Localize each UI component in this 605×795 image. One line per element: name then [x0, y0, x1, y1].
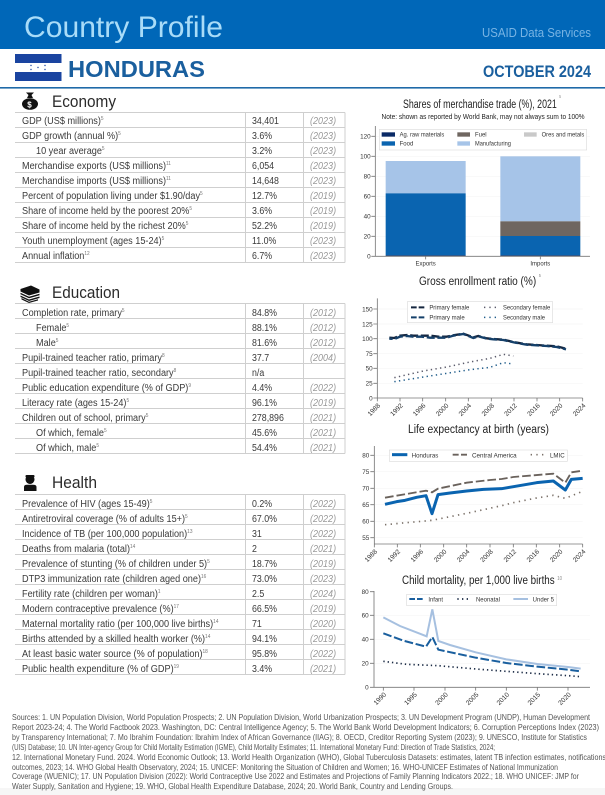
icon: money bag — [22, 92, 38, 110]
row: contraceptive — [22, 603, 336, 615]
chart title: Shares of merchandise trade (%), 2021 — [403, 99, 604, 111]
heading: Economy: Economy — [52, 93, 117, 111]
x axis labels: 2016 — [526, 548, 541, 564]
row: of which female — [36, 427, 336, 439]
y axis labels: 20 — [362, 661, 369, 668]
row: poverty — [22, 190, 336, 202]
y axis labels: 75 — [362, 469, 370, 476]
row: GDP — [22, 115, 336, 127]
line: secondary male — [394, 363, 513, 382]
row: completion rate: (2012) — [310, 307, 336, 319]
row: HIV: Prevalence of HIV (ages 15-49) — [22, 498, 150, 510]
row: maternal mortality: (2020) — [310, 618, 336, 630]
x axis labels: 2008 — [481, 402, 496, 418]
x axis labels: 2005 — [465, 691, 481, 707]
x axis labels: 1996 — [410, 548, 425, 564]
chart: child mortality — [362, 575, 590, 707]
row: children out of school: 5 — [146, 413, 149, 419]
chart: life expectancy at birth — [362, 424, 588, 564]
row: merchandise exports: 11 — [166, 161, 171, 167]
row: fertility — [22, 588, 336, 600]
row: skilled birth: 94.1% — [252, 633, 277, 645]
y axis labels: 60 — [362, 613, 369, 620]
row: merchandise exports: (2023) — [310, 160, 336, 172]
row: teacher ratio primary: (2004) — [310, 352, 336, 364]
row: income poorest: 5 — [189, 206, 192, 212]
row: children out of school: (2021) — [310, 412, 336, 424]
row: merchandise exports — [22, 160, 336, 172]
x axis labels: 2015 — [527, 691, 542, 707]
row: poverty: 5 — [200, 191, 203, 197]
legend: Neonatal — [476, 597, 500, 603]
row: poverty: (2019) — [310, 190, 336, 202]
x axis labels: 2004 — [456, 548, 472, 564]
row: maternal mortality: 14 — [213, 619, 219, 625]
row: GDP growth: GDP growth (annual %) — [22, 130, 118, 142]
row: of which female: Of which, female — [36, 427, 104, 439]
row: 10 year average: 5 — [102, 146, 105, 152]
y axis labels: 60 — [364, 194, 371, 201]
row: stunting — [22, 558, 336, 570]
row: 10 year average: (2023) — [310, 145, 336, 157]
row: literacy: (2019) — [310, 397, 336, 409]
country heading band — [0, 54, 605, 89]
row: income poorest — [22, 205, 336, 217]
row: male completion: Male — [36, 337, 56, 349]
icon: money bag: $ — [27, 100, 32, 110]
row: income richest — [22, 220, 336, 232]
row: children out of school: 278,896 — [252, 412, 284, 424]
heading: Education: Education — [52, 284, 120, 302]
row: education expenditure: 9 — [188, 383, 191, 389]
x axis labels: 2020 — [549, 402, 565, 418]
row: youth unemployment: 11.0% — [252, 235, 277, 247]
row: GDP: 34,401 — [252, 115, 279, 127]
row: GDP growth: 3.6% — [252, 130, 272, 142]
row: of which male: Of which, male — [36, 442, 96, 454]
row: HIV: 5 — [150, 499, 153, 505]
row: merchandise imports: (2023) — [310, 175, 336, 187]
row: of which male — [36, 442, 336, 454]
row: contraceptive: (2019) — [310, 603, 336, 615]
row: teacher ratio secondary: Pupil-trained teacher ratio, secondary — [22, 367, 174, 379]
x axis labels: 2024 — [572, 548, 588, 564]
row: children out of school: Children out of school, primary — [22, 412, 146, 424]
y axis labels: 0 — [369, 395, 373, 402]
chart title: Gross enrollment ratio (%) — [419, 276, 553, 288]
row: TB: 31 — [252, 528, 262, 540]
row: of which male: 54.4% — [252, 442, 277, 454]
sources footnote — [12, 712, 605, 791]
row: maternal mortality: Maternal mortality ratio (per 100,000 live births) — [22, 618, 213, 630]
legend: Manufacturing — [475, 142, 511, 148]
row: teacher ratio primary: 37.7 — [252, 352, 269, 364]
row: skilled birth: 14 — [205, 634, 210, 640]
row: skilled birth — [22, 633, 336, 645]
y axis labels — [362, 453, 370, 542]
legend — [407, 594, 557, 606]
row: female completion: Female — [36, 322, 66, 334]
row: 10 year average: 3.2% — [252, 145, 272, 157]
y axis labels: 55 — [362, 535, 370, 542]
row: children out of school — [22, 412, 336, 424]
legend: Under 5 — [533, 597, 555, 603]
x axis labels: 2000 — [433, 548, 449, 564]
row: DTP3: 16 — [201, 574, 206, 580]
bar: imports — [500, 156, 580, 256]
x axis labels: 2010 — [496, 691, 511, 707]
row: inflation: 6.7% — [252, 250, 272, 262]
legend: LMIC — [550, 453, 565, 459]
row: DTP3: 73.0% — [252, 573, 277, 585]
legend — [407, 302, 553, 323]
row: contraceptive: 66.5% — [252, 603, 277, 615]
row: water: 18 — [203, 649, 208, 655]
x axis labels: 2020 — [557, 691, 573, 707]
chart title: 5 — [559, 94, 561, 99]
y axis labels — [360, 134, 371, 261]
row: youth unemployment: 5 — [162, 236, 164, 242]
x axis labels — [364, 548, 588, 564]
row: 10 year average — [36, 145, 336, 157]
x axis labels: 1988 — [364, 548, 379, 564]
chart title: Life expectancy at birth (years) — [408, 424, 549, 436]
row: health expenditure: 3.4% — [252, 663, 272, 675]
row: merchandise imports: 11 — [166, 176, 171, 182]
y axis labels: 75 — [366, 351, 373, 358]
row: literacy: 5 — [126, 398, 129, 404]
x axis labels: 2000 — [435, 402, 451, 418]
row: merchandise exports: Merchandise exports (US$ millions) — [22, 160, 166, 172]
row: income poorest: Share of income held by the poorest 20% — [22, 205, 189, 217]
legend: Secondary female — [503, 306, 551, 312]
row: poverty: 12.7% — [252, 190, 277, 202]
x axis labels: 1992 — [387, 548, 402, 564]
y axis labels: 125 — [362, 321, 373, 328]
y axis labels — [362, 306, 373, 402]
x axis labels: 2004 — [458, 402, 473, 418]
row: male completion: 5 — [56, 338, 59, 344]
row: stunting: (2019) — [310, 558, 336, 570]
y axis labels: 120 — [360, 134, 371, 141]
row: teacher ratio primary: 8 — [162, 353, 165, 359]
row: youth unemployment: (2023) — [310, 235, 336, 247]
icon: flag of Honduras — [15, 54, 62, 81]
legend — [379, 129, 587, 150]
row: malaria: Deaths from malaria (total) — [22, 543, 130, 555]
table: economy indicators — [15, 112, 345, 262]
row: fertility: 2.5 — [252, 588, 264, 600]
legend: Secondary male — [503, 316, 546, 322]
legend: Infant — [428, 597, 443, 603]
x axis labels: Exports — [416, 262, 436, 268]
row: TB — [22, 528, 336, 540]
row: inflation — [22, 250, 336, 262]
y axis labels: 40 — [364, 214, 371, 221]
chart title: 10 — [557, 576, 562, 582]
chart: gross enrollment ratio — [362, 273, 588, 418]
row: merchandise exports: 6,054 — [252, 160, 275, 172]
panel: education — [15, 284, 345, 454]
row: DTP3: DTP3 immunization rate (children aged one) — [22, 573, 201, 585]
row: health expenditure: 19 — [174, 664, 179, 670]
table: education indicators — [15, 304, 345, 454]
y axis labels — [362, 589, 369, 692]
line: Honduras — [385, 478, 583, 514]
line: primary male — [389, 334, 566, 349]
row: female completion: 88.1% — [252, 322, 277, 334]
row: fertility: (2024) — [310, 588, 336, 600]
row: youth unemployment: Youth unemployment (ages 15-24) — [22, 235, 162, 247]
x axis labels: 2024 — [572, 402, 588, 418]
row: skilled birth: (2019) — [310, 633, 336, 645]
row: male completion — [36, 337, 336, 349]
legend — [389, 450, 567, 461]
row: inflation: (2023) — [310, 250, 336, 262]
y axis labels: 80 — [364, 174, 371, 181]
row: GDP: (2023) — [310, 115, 336, 127]
row: maternal mortality — [22, 618, 336, 630]
row: contraceptive: Modern contraceptive prevalence (%) — [22, 603, 174, 615]
header banner — [0, 0, 605, 49]
row: stunting: 5 — [207, 559, 210, 565]
row: antiretroviral: (2022) — [310, 513, 336, 525]
sources footnote: Water Supply, Sanitation and Hygiene; 19. WHO, Global Health Expenditure Database, 2024; 20. World Bank, Country and Lending Groups. — [12, 781, 453, 791]
row: GDP growth — [22, 130, 336, 142]
row: fertility: Fertility rate (children per woman) — [22, 588, 158, 600]
row: of which female: 5 — [104, 428, 107, 434]
x axis labels: 2012 — [503, 402, 519, 418]
legend: Primary female — [429, 306, 470, 312]
row: fertility: 1 — [158, 589, 161, 595]
line: under 5 — [383, 609, 581, 669]
row: teacher ratio secondary: n/a — [252, 367, 265, 379]
y axis labels: 20 — [364, 234, 371, 241]
row: merchandise imports — [22, 175, 336, 187]
row: of which male: (2021) — [310, 442, 336, 454]
x axis labels: 2008 — [479, 548, 495, 564]
x axis labels: 1996 — [412, 402, 428, 418]
x axis labels: 1988 — [367, 402, 382, 418]
row: 10 year average: 10 year average — [36, 145, 102, 157]
row: education expenditure: Public education expenditure (% of GDP) — [22, 382, 188, 394]
row: GDP growth: (2023) — [310, 130, 336, 142]
publisher: USAID Data Services: USAID Data Services — [482, 26, 591, 40]
y axis labels: 50 — [366, 366, 373, 373]
row: completion rate — [22, 307, 336, 319]
icon: health worker — [24, 475, 36, 491]
row: of which female: (2021) — [310, 427, 336, 439]
x axis labels — [367, 402, 588, 418]
x axis labels: 1995 — [403, 691, 419, 707]
x axis labels: 1990 — [373, 691, 388, 707]
legend: Ag. raw materials — [400, 133, 444, 139]
row: income richest: 52.2% — [252, 220, 277, 232]
legend: Fuel — [475, 133, 487, 139]
row: malaria: 14 — [130, 544, 135, 550]
row: literacy — [22, 397, 336, 409]
table: health indicators — [15, 494, 345, 675]
row: of which female: 45.6% — [252, 427, 277, 439]
chart title: Child mortality, per 1,000 live births — [402, 575, 581, 587]
y axis labels: 80 — [362, 589, 369, 596]
row: malaria: 2 — [252, 543, 257, 555]
row: income poorest: (2019) — [310, 205, 336, 217]
row: maternal mortality: 71 — [252, 618, 262, 630]
row: completion rate: Completion rate, primary — [22, 307, 122, 319]
row: contraceptive: 17 — [174, 604, 179, 610]
x axis labels — [373, 691, 573, 707]
row: male completion: (2012) — [310, 337, 336, 349]
icon: stack of books — [20, 286, 40, 303]
y axis labels: 0 — [367, 254, 371, 261]
row: education expenditure: 4.4% — [252, 382, 272, 394]
legend: Primary male — [429, 316, 465, 322]
row: poverty: Percent of population living under $1.90/day — [22, 190, 200, 202]
line: secondary female — [394, 354, 513, 378]
row: HIV — [22, 498, 336, 510]
y axis labels: 25 — [366, 381, 373, 388]
bar: exports — [386, 161, 466, 256]
row: HIV: 0.2% — [252, 498, 272, 510]
row: literacy: Literacy rate (ages 15-24) — [22, 397, 126, 409]
x axis labels — [416, 262, 550, 268]
row: inflation: 12 — [84, 251, 90, 257]
row: antiretroviral: Antiretroviral coverage (% of adults 15+) — [22, 513, 185, 525]
y axis labels: 100 — [360, 154, 371, 161]
line: LMIC — [385, 491, 583, 525]
row: stunting: 18.7% — [252, 558, 277, 570]
y axis labels: 60 — [362, 519, 370, 526]
row: teacher ratio primary — [22, 352, 336, 364]
row: malaria: (2021) — [310, 543, 336, 555]
row: GDP: 5 — [101, 116, 104, 122]
legend: Central America — [472, 453, 517, 459]
row: teacher ratio secondary: 8 — [174, 368, 176, 374]
panel: economy — [15, 92, 345, 262]
row: teacher ratio primary: Pupil-trained teacher ratio, primary — [22, 352, 162, 364]
x axis labels: 2016 — [526, 402, 542, 418]
y axis labels: 100 — [362, 336, 373, 343]
row: female completion: (2012) — [310, 322, 336, 334]
row: DTP3: (2023) — [310, 573, 336, 585]
legend: Ores and metals — [542, 133, 584, 139]
panel: health — [15, 474, 345, 675]
row: skilled birth: Births attended by a skilled health worker (%) — [22, 633, 205, 645]
chart: shares of merchandise trade — [360, 94, 590, 268]
row: health expenditure — [22, 663, 336, 675]
row: health expenditure: (2021) — [310, 663, 336, 675]
heading: Health: Health — [52, 474, 97, 492]
y axis labels: 0 — [365, 685, 369, 692]
row: income poorest: 3.6% — [252, 205, 272, 217]
legend: Honduras — [412, 453, 438, 459]
line: primary female — [389, 334, 566, 349]
row: TB: (2022) — [310, 528, 336, 540]
row: female completion: 5 — [66, 323, 69, 329]
row: income richest: 5 — [186, 221, 189, 227]
row: youth unemployment — [22, 235, 336, 247]
row: health expenditure: Public health expenditure (% of GDP) — [22, 663, 174, 675]
line: Central America — [385, 471, 583, 498]
row: GDP growth: 5 — [118, 131, 121, 137]
row: inflation: Annual inflation — [22, 250, 84, 262]
row: education expenditure: (2022) — [310, 382, 336, 394]
row: GDP: GDP (US$ millions) — [22, 115, 101, 127]
title: Country Profile: Country Profile — [24, 11, 223, 44]
row: TB: Incidence of TB (per 100,000 population) — [22, 528, 187, 540]
x axis labels: 2020 — [549, 548, 565, 564]
row: completion rate: 84.8% — [252, 307, 277, 319]
row: malaria — [22, 543, 336, 555]
row: education expenditure — [22, 382, 336, 394]
row: male completion: 81.6% — [252, 337, 277, 349]
row: antiretroviral: 5 — [185, 514, 188, 520]
row: antiretroviral: 67.0% — [252, 513, 277, 525]
y axis labels: 150 — [362, 306, 373, 313]
y axis labels: 65 — [362, 502, 370, 509]
row: water: 95.8% — [252, 648, 277, 660]
row: literacy: 96.1% — [252, 397, 277, 409]
row: water: (2022) — [310, 648, 336, 660]
row: DTP3 — [22, 573, 336, 585]
row: of which male: 5 — [96, 443, 99, 449]
row: merchandise imports: 14,648 — [252, 175, 279, 187]
y axis labels: 80 — [362, 453, 370, 460]
country name: HONDURAS — [68, 56, 205, 82]
legend: Food — [400, 142, 413, 148]
row: teacher ratio secondary — [22, 367, 265, 379]
y axis labels: 40 — [362, 637, 369, 644]
x axis labels: 2000 — [434, 691, 450, 707]
x axis labels: 1992 — [389, 402, 405, 418]
row: water: At least basic water source (% of population) — [22, 648, 203, 660]
row: merchandise imports: Merchandise imports (US$ millions) — [22, 175, 166, 187]
row: income richest: (2019) — [310, 220, 336, 232]
x axis labels: 2012 — [503, 548, 518, 564]
row: income richest: Share of income held by the richest 20% — [22, 220, 186, 232]
x axis labels: Imports — [530, 262, 550, 268]
y axis labels: 70 — [362, 486, 370, 493]
line: neonatal — [383, 661, 581, 677]
line: infant — [383, 633, 581, 671]
row: HIV: (2022) — [310, 498, 336, 510]
row: water — [22, 648, 336, 660]
row: female completion — [36, 322, 336, 334]
chart title: 5 — [539, 273, 541, 278]
row: antiretroviral — [22, 513, 336, 525]
row: completion rate: 5 — [122, 308, 125, 314]
row: TB: 13 — [187, 529, 193, 535]
row: stunting: Prevalence of stunting (% of children under 5) — [22, 558, 207, 570]
